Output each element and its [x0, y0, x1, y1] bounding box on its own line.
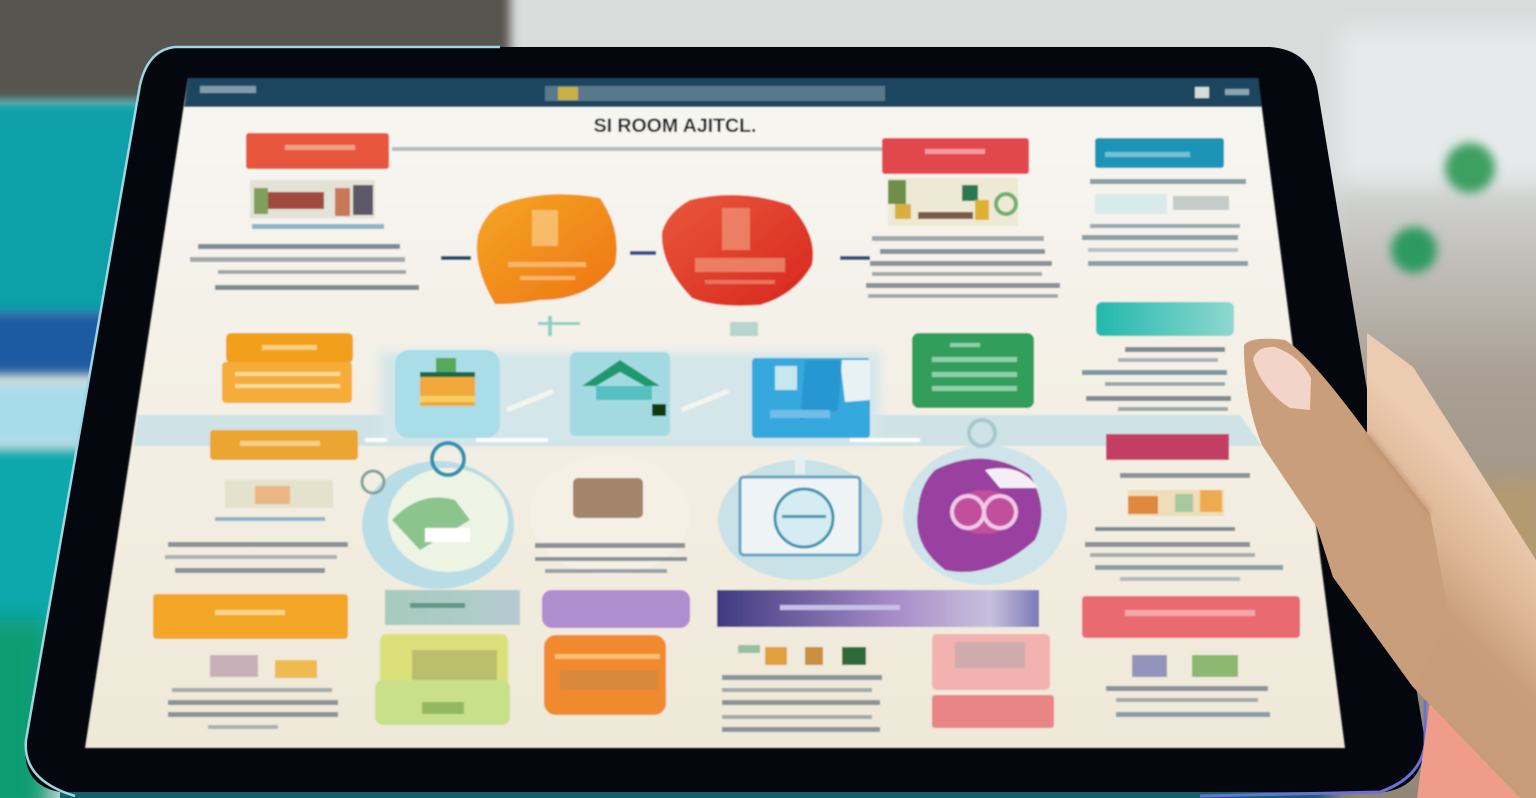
panel: right crimson [1085, 434, 1283, 581]
small connectors [538, 316, 758, 336]
box icon [530, 455, 690, 575]
arrow: left to orange [441, 256, 471, 260]
red blob [662, 195, 813, 306]
orange blob [477, 194, 617, 304]
hand and finger [1244, 333, 1536, 798]
subtitle line [392, 147, 882, 151]
screen [85, 78, 1345, 748]
yellow-green card [375, 634, 510, 725]
panel: green card [912, 333, 1034, 408]
panel: left amber section [165, 430, 358, 573]
bottom-right text block [1106, 655, 1270, 717]
panel: left orange stack [222, 333, 353, 403]
globe [362, 443, 514, 589]
panel: top-middle-right [866, 138, 1060, 298]
title: SI ROOM AJITCL. [594, 115, 756, 137]
tablet lower-right rim [1200, 700, 1425, 796]
panel: right teal [1082, 302, 1234, 411]
arrow: red to right [840, 256, 870, 260]
orange stacked card [544, 635, 666, 715]
bottom-middle text block [722, 645, 882, 732]
top bar labels [200, 86, 1249, 101]
bottom row banners [153, 590, 1300, 639]
pink card [932, 634, 1054, 728]
icon card: document [752, 358, 870, 438]
monitor icon [718, 452, 882, 580]
screen top bar [184, 78, 1262, 107]
purple blob [903, 420, 1067, 585]
panel: top-right blue [1082, 138, 1248, 266]
icon card: landscape [395, 350, 500, 438]
horizontal band and halo behind icons [134, 352, 1262, 446]
arrow: orange to red [630, 251, 656, 255]
panel: top-left [190, 133, 419, 290]
icon card: house [570, 352, 670, 436]
tablet rim highlight [26, 47, 500, 796]
bottom-left text block [168, 655, 338, 729]
